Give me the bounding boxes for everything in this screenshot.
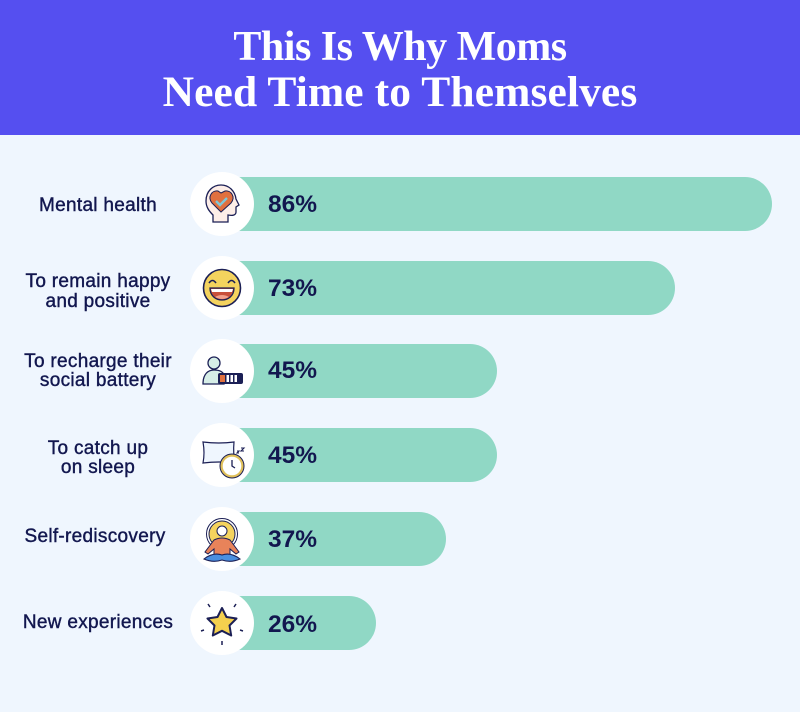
value: 73% [268,275,317,302]
icon backing circle [190,507,254,571]
label: and positive [45,291,150,312]
row: social battery [24,339,497,403]
label [26,271,170,312]
icon: head with heart [205,184,240,223]
icon backing circle [190,256,254,320]
row: new experiences [23,591,376,655]
icon: meditating figure [203,518,241,562]
row: mental health [39,172,772,236]
label: social battery [40,370,156,391]
label: Mental health [39,195,157,216]
icon backing circle [190,339,254,403]
label: To recharge their [24,351,172,372]
bar: 26% [220,596,376,650]
value: 45% [268,357,317,384]
icon: pillow and clock [202,441,246,478]
bar: 73% [220,261,675,315]
label: To remain happy [26,271,170,292]
label [48,438,148,478]
icon: person with low battery [202,356,243,385]
row: sleep [48,423,497,487]
bar: 45% [220,344,497,398]
header banner [0,0,800,135]
label: on sleep [61,457,135,478]
title [163,24,637,116]
label: Self-rediscovery [24,526,166,547]
label [24,351,172,391]
icon backing circle [190,423,254,487]
icon: shining star [200,604,244,645]
label: To catch up [48,438,148,459]
value: 37% [268,526,317,553]
value: 26% [268,611,317,638]
row: happy [26,256,675,320]
bar: 86% [220,177,772,231]
icon backing circle [190,172,254,236]
title: This Is Why Moms [233,24,567,70]
title: Need Time to Themselves [163,68,637,116]
icon: smiling face [202,268,242,308]
value: 86% [268,191,317,218]
row: self-rediscovery [24,507,446,571]
label: New experiences [23,612,173,633]
bar: 37% [220,512,446,566]
value: 45% [268,442,317,469]
bar: 45% [220,428,497,482]
icon backing circle [190,591,254,655]
